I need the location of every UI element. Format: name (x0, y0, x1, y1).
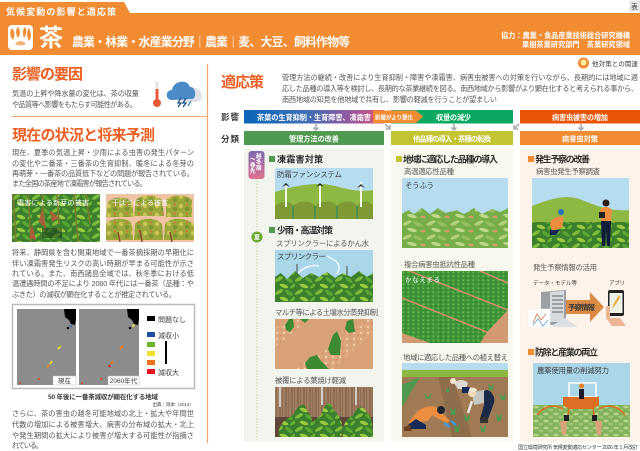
label: use of forecast information: 発生予察情報の活用 (533, 263, 597, 272)
text: pests: や発生期間の拡大により被害が増大する可能性が指摘さ (12, 431, 194, 440)
footer credit: 国立環境研究所 気候変動適応センター 2026 年 1 月改訂 (518, 443, 638, 451)
label: replanting: 地域に適応した品種への植え替え (403, 353, 508, 362)
cooperating institutions: 協力：農業・食品産業技術総合研究機構 (501, 31, 631, 40)
season timeline: 冬 (256, 158, 262, 166)
text: future projection (12, 248, 195, 299)
impact bar: growth inhibition: 茶葉の生育抑制・生育障害、凍霜害 (257, 113, 371, 122)
map: present: 現在 (58, 376, 72, 385)
arrow: forecast information: 予察情報 (568, 302, 596, 312)
season timeline: 先 (250, 167, 256, 175)
season timeline: 春 (250, 161, 256, 169)
label: shading: 被覆による葉焼け軽減 (275, 376, 347, 385)
icon: tea leaves (8, 25, 33, 50)
diagram: forecast information: アプリ (609, 280, 625, 287)
impact bar: yield decrease (391, 110, 513, 124)
image: drought damage: 干ばつによる被害 (112, 198, 168, 207)
cooperating institutions: 果樹茶業研究部門 茶業研究領域 (522, 40, 631, 49)
season timeline: 期 (256, 164, 262, 172)
map: 2060s: 2060年代 (110, 376, 138, 385)
icon: rain cloud (167, 82, 202, 107)
image: replanting workers (402, 363, 508, 437)
impact bar: pests (520, 110, 640, 124)
image: shade cover (275, 387, 373, 437)
page tag (630, 1, 640, 11)
impact bar: yield decrease: 収量の減少 (436, 113, 472, 122)
icon: chart card (528, 309, 550, 328)
category bar: variety change (391, 131, 513, 145)
arrow: worsening impact (373, 110, 423, 123)
heading: control and industry: 防除と産業の両立 (535, 346, 598, 358)
season timeline: 〜 (250, 157, 256, 163)
text: pests: さらに、茶の害虫の越冬可能地域の北上・拡大や年間世 (12, 409, 194, 418)
text: current state: 再萌芽・一番茶の品質低下などの問題が報告されている。 (12, 169, 194, 178)
text: future projection: 温遭遇時間の不足により 2060 年代には一番茶（品種：や (12, 279, 194, 288)
category bar: pest control: 病害虫対策 (562, 134, 599, 144)
impact bar: growth inhibition (244, 110, 384, 124)
image: pesticide reduction tractor (533, 363, 630, 437)
text: current state (12, 148, 194, 188)
subtitle: sector: 農業・林業・水産業分野｜農業｜麦、大豆、飼料作物等 (72, 35, 350, 49)
text: future projection: ぶきた）の減収が顕在化することが推定されている。 (12, 290, 176, 299)
map source: 出典：岡本（2014） (152, 401, 194, 408)
label: mulching: マルチ等による土壌水分蒸発抑制 (275, 308, 378, 317)
text: pests: 代数の増加による被害増大、病害の分布域の拡大・北上 (12, 420, 194, 429)
row label: classification: 分類 (221, 134, 239, 144)
diagram: forecast information: データ・モデル等 (533, 279, 577, 287)
text: impact factors (12, 89, 139, 109)
diagram: forecast information (528, 279, 626, 328)
text: impact factors: 気温の上昇や降水量の変化は、茶の収量 (12, 89, 139, 98)
text: future projection: 将来、静岡県を含む関東地域で一番茶摘採期の早期化に (12, 248, 194, 257)
heading: current state and projection: 現在の状況と将来予測 (12, 126, 155, 144)
image: pesticide reduction tractor: 農薬使用量の削減努力 (537, 366, 609, 375)
heading: impact factors: 影響の要因 (12, 65, 83, 83)
heading: outbreak forecasting: 発生予察の改善 (535, 154, 590, 164)
map caption: 50 年後に一番茶減収が顕在化する地域 (48, 392, 158, 401)
icon: thermometer (153, 81, 161, 107)
row label: impact: 影響 (221, 112, 239, 122)
page tag: 表 (631, 2, 638, 11)
panel: pest control (520, 149, 640, 442)
connecting arrows (314, 124, 584, 130)
image: frost fan system (275, 168, 373, 219)
panel: current state and projection (12, 126, 195, 450)
season timeline (248, 151, 264, 440)
map legend: 減収小 (158, 331, 179, 340)
text: current state: また全国の茶産地で凍霜害が報告されている。 (12, 179, 147, 188)
image: frost damage to new buds: 霜害による新芽の被害 (17, 198, 89, 207)
text: current state: 現在、夏季の気温上昇・少雨による虫害の発生パターン (12, 148, 194, 157)
text: pests (12, 409, 194, 450)
image: frost fan system: 防霜ファンシステム (277, 169, 342, 179)
panel: variety introduction (391, 149, 513, 442)
header tab label: 気候変動の影響と適応策 (6, 6, 116, 17)
image: mulch (275, 319, 373, 369)
map legend: 減収大 (158, 368, 179, 377)
image: drought damage (106, 194, 194, 242)
season timeline: 越 (256, 152, 262, 160)
image: frost damage to new buds (12, 194, 100, 242)
header band (0, 2, 640, 55)
label: heat tolerant variety: 高温適応性品種 (404, 167, 455, 176)
impact bar: pests: 病害虫被害の増加 (552, 113, 608, 122)
image: soufu: そうふう (405, 181, 434, 190)
category bar: variety change: 他品種の導入・茶種の転換 (413, 134, 491, 144)
image: sprinkler: スプリンクラー (277, 252, 326, 261)
panel: management measures (244, 149, 384, 442)
image: field survey (532, 178, 629, 248)
label: pest resistant variety: 複合病害虫抵抗性品種 (404, 260, 476, 269)
label: pest survey: 病害虫発生予察調査 (536, 167, 601, 176)
category bar: pest control (520, 131, 640, 145)
arrow: worsening impact: 影響がより悪化 (375, 114, 413, 122)
title: tea: 茶 (39, 25, 63, 52)
text: impact factors: や品質等へ影響をもたらす可能性がある。 (12, 100, 137, 109)
image: soufu (402, 178, 508, 248)
category bar: management: 管理方法の改善 (289, 134, 339, 144)
text: future projection: れている。また、南西諸島全域では、秋冬季における低 (12, 269, 195, 278)
panel: impact factors (12, 65, 202, 109)
season timeline: 夏 (254, 234, 260, 242)
text: adaptation summary (282, 73, 638, 104)
heading: adaptation measures: 適応策 (221, 73, 264, 91)
heading: regional varieties: 地域に適応した品種の導入 (403, 154, 498, 164)
legend: link to other measures: 他対策との関連 (592, 59, 638, 68)
map legend: 問題なし (158, 316, 186, 324)
panel divider (206, 64, 208, 443)
image: kanaemaru (402, 268, 508, 343)
map legend (147, 316, 186, 377)
map: 2060s (79, 309, 139, 385)
map figure: yield reduction (12, 304, 194, 388)
category bar: management (244, 131, 384, 145)
text: current state: の変化や二番茶・三番茶の生育抑制、暖冬による冬芽の (12, 159, 194, 168)
cooperating institutions (501, 31, 631, 49)
text: future projection: 伴い凍霜害発生リスクの高い時期が早まる可能性が示さ (12, 259, 194, 268)
icon: smartphone (606, 290, 626, 326)
text: adaptation summary: 応した品種の導入等を検討し、長期的な茶業継続を図る。南西地域から影響がより顕在化すると考えられる事から、 (282, 84, 638, 93)
text: adaptation summary: 南西地域の知見を他地域で共有し、影響の軽減を行うことが望ましい (282, 95, 497, 104)
map: present (17, 309, 76, 385)
icon: server (541, 290, 578, 327)
heading: low rain and heat countermeasures: 少雨・高温対策 (277, 224, 333, 236)
image: kanaemaru: かなえまる (405, 276, 440, 284)
text: adaptation summary: 管理方法の継続・改善により生育抑制・障害や凍霜害、病害虫被害への対策を行いながら、長期的には地域に適 (282, 73, 638, 82)
legend: link to other measures (578, 58, 638, 68)
text: pests: れている。 (12, 441, 43, 450)
heading: frost countermeasures: 凍霜害対策 (277, 154, 323, 164)
label: sprinkler irrigation: スプリンクラーによるかん水 (276, 239, 370, 248)
image: sprinkler (275, 250, 373, 302)
